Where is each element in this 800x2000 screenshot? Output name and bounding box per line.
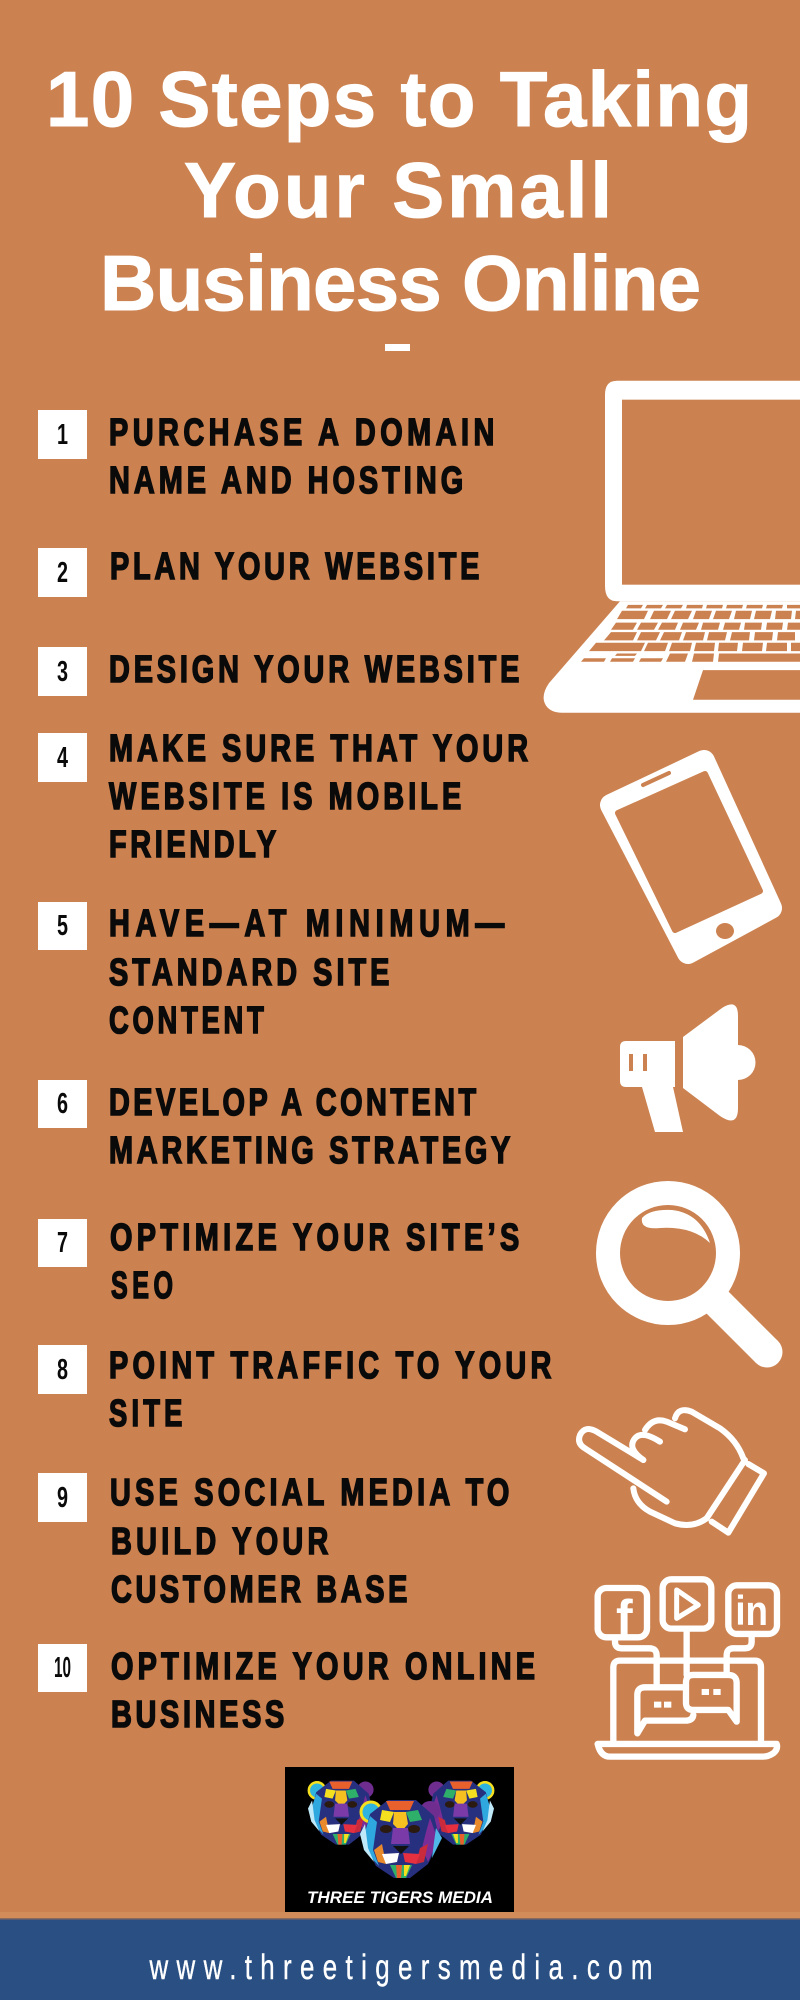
number badge 2: 2: [57, 557, 68, 589]
step 4 text: MAKE SURE THAT YOUR: [109, 727, 528, 770]
step 9 text: BUILD YOUR: [111, 1520, 328, 1563]
step 4 text: FRIENDLY: [109, 823, 276, 866]
icon: smartphone: [611, 761, 771, 953]
number badge 1: 1: [57, 419, 68, 451]
step 10: [38, 1644, 535, 1736]
icon: laptop: [544, 381, 800, 713]
number badge 2: [38, 548, 87, 597]
step 7: [38, 1216, 519, 1306]
title: [46, 55, 752, 327]
step 5 text: CONTENT: [109, 1000, 264, 1042]
step 9 text: [110, 1471, 509, 1611]
number badge 3: [38, 647, 87, 696]
icon: megaphone: [620, 1004, 756, 1132]
number badge 5: [38, 902, 87, 950]
number badge 7: 7: [57, 1227, 68, 1259]
step 6 text: DEVELOP A CONTENT: [109, 1081, 476, 1124]
website url: www.threetigersmedia.com: [149, 1947, 652, 1987]
step 10 text: BUSINESS: [111, 1693, 284, 1736]
step 5 text: STANDARD SITE: [109, 951, 389, 994]
step 6: [38, 1080, 510, 1172]
number badge 9: 9: [57, 1482, 68, 1514]
step 5: [38, 902, 504, 1042]
step 7 text: SEO: [111, 1264, 173, 1306]
step 3: [38, 647, 519, 696]
step 2 text: PLAN YOUR WEBSITE: [110, 545, 479, 588]
step 4 text: WEBSITE IS MOBILE: [109, 775, 461, 818]
number badge 1: [38, 410, 87, 459]
number badge 4: [38, 733, 87, 782]
logo: Three Tigers Media: [285, 1767, 514, 1912]
title dash: [385, 344, 410, 351]
step 7 text: OPTIMIZE YOUR SITE’S: [110, 1216, 519, 1259]
footer bar: [0, 1918, 800, 2000]
step 8 text: POINT TRAFFIC TO YOUR: [109, 1344, 551, 1387]
number badge 8: 8: [57, 1354, 68, 1386]
step 1 text: PURCHASE A DOMAIN: [109, 411, 494, 454]
number badge 10: 10: [54, 1652, 71, 1684]
logo: Three Tigers Media: THREE TIGERS MEDIA: [307, 1888, 493, 1907]
number badge 9: [38, 1473, 87, 1522]
number badge 6: [38, 1080, 87, 1128]
step 1: [38, 410, 494, 502]
facebook tile: f: [616, 1590, 633, 1646]
video play tile: [663, 1579, 711, 1629]
title: Your Small: [184, 146, 612, 234]
number badge 5: 5: [57, 910, 68, 942]
step 7 text: [110, 1216, 519, 1306]
number badge 8: [38, 1345, 87, 1394]
step 8: [38, 1344, 551, 1435]
step 6 text: MARKETING STRATEGY: [109, 1129, 510, 1172]
step 10 text: OPTIMIZE YOUR ONLINE: [111, 1645, 535, 1688]
number badge 3: 3: [57, 656, 68, 688]
icon: magnifying glass: [608, 1193, 782, 1368]
number badge 4: 4: [57, 742, 68, 774]
title: Business Online: [100, 239, 701, 327]
number badge 6: 6: [57, 1088, 68, 1120]
icon: pointing hand: [579, 1410, 764, 1533]
icon: social media laptop: [598, 1579, 777, 1757]
step 4 text: [109, 727, 528, 866]
linkedin tile: in: [735, 1587, 768, 1634]
step 4: [38, 727, 528, 866]
step 9: [38, 1471, 509, 1611]
step 5 text: HAVE—AT MINIMUM—: [109, 902, 504, 945]
step 1 text: [109, 411, 494, 502]
number badge 7: [38, 1219, 87, 1267]
step 9 text: USE SOCIAL MEDIA TO: [110, 1471, 509, 1514]
step 1 text: NAME AND HOSTING: [109, 459, 463, 502]
number badge 10: [38, 1644, 87, 1692]
step 5 text: [109, 902, 504, 1042]
step 3 text: DESIGN YOUR WEBSITE: [109, 648, 519, 691]
step 8 text: SITE: [109, 1393, 182, 1435]
step 10 text: [111, 1645, 535, 1736]
title: 10 Steps to Taking: [46, 55, 752, 143]
step 2: [38, 545, 479, 597]
step 6 text: [109, 1081, 510, 1172]
facebook tile: [598, 1588, 647, 1646]
step 8 text: [109, 1344, 551, 1435]
step 9 text: CUSTOMER BASE: [111, 1568, 407, 1611]
